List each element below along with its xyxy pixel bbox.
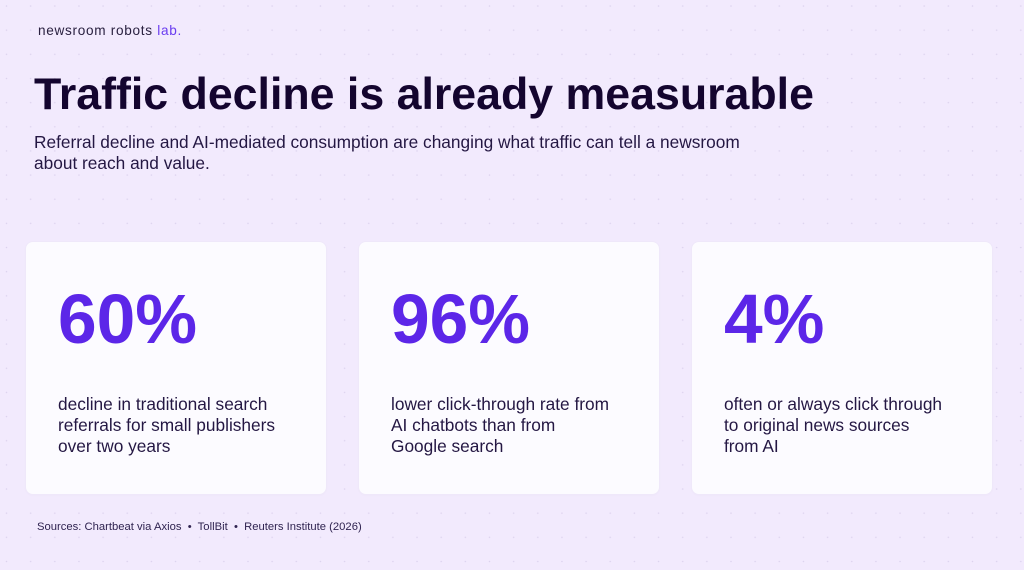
panel: 60% stat — [26, 242, 326, 494]
subtitle — [34, 132, 740, 173]
stat description — [58, 394, 275, 456]
stat description: often or always click through — [724, 394, 942, 414]
stat description: AI chatbots than from — [391, 415, 555, 435]
stat description: referrals for small publishers — [58, 415, 275, 435]
sources footnote: Sources: Chartbeat via Axios • TollBit • Reuters Institute (2026) — [37, 521, 362, 533]
stat number: 96% — [391, 280, 530, 358]
logo: newsroom robots lab. — [38, 23, 182, 38]
panel: 4% stat — [692, 242, 992, 494]
subtitle: Referral decline and AI-mediated consumption are changing what traffic can tell a newsroom — [34, 132, 740, 152]
subtitle: about reach and value. — [34, 153, 210, 173]
stat description — [391, 394, 609, 456]
stat description — [724, 394, 942, 456]
stat number: 4% — [724, 280, 824, 358]
stat number: 60% — [58, 280, 197, 358]
panel: 96% stat — [359, 242, 659, 494]
title: Traffic decline is already measurable — [34, 70, 814, 119]
stat description: to original news sources — [724, 415, 909, 435]
stat description: over two years — [58, 436, 170, 456]
stat description: lower click-through rate from — [391, 394, 609, 414]
stat description: decline in traditional search — [58, 394, 267, 414]
stat description: from AI — [724, 436, 779, 456]
stat description: Google search — [391, 436, 503, 456]
